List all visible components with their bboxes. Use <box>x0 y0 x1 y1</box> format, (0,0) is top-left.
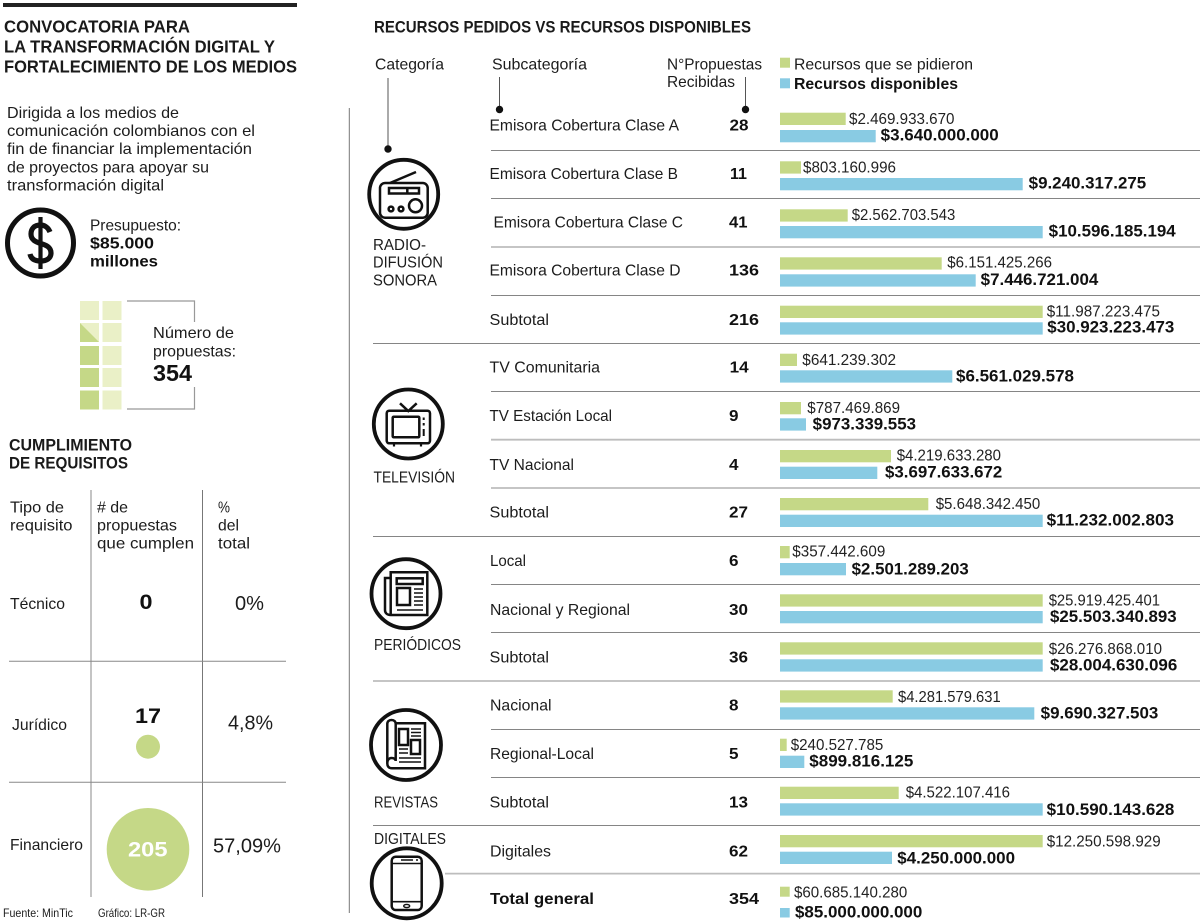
row: television subtotal: Subtotal <box>490 505 549 522</box>
row: Total general: Total general <box>490 891 594 908</box>
intro text: de proyectos para apoyar su <box>7 160 209 177</box>
row: Digitales: $4.250.000.000 <box>897 849 1015 867</box>
row: Nacional: $4.281.579.631 <box>898 689 1001 706</box>
row: Regional-Local: 5 <box>729 746 739 763</box>
row: Emisora Cobertura Clase B: Emisora Cobertura Clase B <box>490 166 678 183</box>
row: Emisora Cobertura Clase C <box>494 207 1177 241</box>
top rule <box>3 3 297 7</box>
source and credit: Fuente: MinTic <box>3 906 73 920</box>
title: LA TRANSFORMACIÓN DIGITAL Y <box>4 36 275 57</box>
row: Total general: $60.685.140.280 <box>794 885 907 902</box>
row: TV Nacional: $3.697.633.672 <box>885 463 1002 481</box>
title <box>4 17 297 77</box>
row: Local: Local <box>490 553 526 570</box>
column heads: % <box>218 500 230 517</box>
table grid <box>9 490 286 897</box>
row: Financiero: 205 <box>128 839 168 862</box>
row: periódicos subtotal: 36 <box>729 650 748 667</box>
column heads <box>10 500 250 553</box>
legend <box>780 56 973 93</box>
row: Emisora Cobertura Clase C: $2.562.703.543 <box>852 207 955 224</box>
row: Financiero: 57,09% <box>213 836 281 858</box>
icon: television <box>374 390 443 458</box>
budget text <box>90 218 181 271</box>
intro text: comunicación colombianos con el <box>7 123 255 140</box>
row: Digitales: 62 <box>729 844 748 861</box>
row: TV Comunitaria <box>490 352 1074 385</box>
row: Local: $2.501.289.203 <box>852 560 969 578</box>
category label: REVISTAS <box>374 794 438 811</box>
row: Regional-Local <box>490 737 913 771</box>
row: periódicos subtotal <box>490 641 1177 675</box>
row: Local <box>490 544 969 578</box>
proposals count text: Número de <box>153 325 234 342</box>
heading: DE REQUISITOS <box>9 454 128 473</box>
icon: radio <box>369 160 438 229</box>
title: FORTALECIMIENTO DE LOS MEDIOS <box>4 57 297 77</box>
row: Nacional: Nacional <box>490 698 552 715</box>
row: Jurídico: Jurídico <box>12 717 67 734</box>
row: television subtotal: 27 <box>729 505 748 522</box>
row: Financiero: Financiero <box>10 837 83 854</box>
category: digitales <box>372 831 446 918</box>
category label <box>373 237 443 290</box>
icon: dollar coin <box>8 210 74 276</box>
row: Nacional: $9.690.327.503 <box>1041 705 1158 723</box>
proportion squares <box>80 301 122 410</box>
legend: Recursos disponibles <box>794 76 958 93</box>
row: Total general: 354 <box>729 891 759 908</box>
heading <box>9 436 132 473</box>
row: Nacional y Regional: Nacional y Regional <box>490 602 630 619</box>
row: Jurídico: 4,8% <box>228 712 273 734</box>
row: TV Nacional: 4 <box>729 457 739 474</box>
row: Nacional y Regional: 30 <box>729 602 748 619</box>
row: Nacional: 8 <box>729 698 739 715</box>
icon: newspaper <box>372 559 440 628</box>
row: Emisora Cobertura Clase D <box>490 255 1099 289</box>
row: Emisora Cobertura Clase C: 41 <box>729 215 748 232</box>
row: TV Estación Local <box>490 400 916 433</box>
category label: RADIO- <box>373 237 426 254</box>
column headers: N°Propuestas <box>667 56 762 73</box>
row: Jurídico: 17 <box>135 705 161 728</box>
proposals count text <box>153 325 236 386</box>
row: Técnico <box>10 591 264 615</box>
category label: DIFUSIÓN <box>373 253 443 272</box>
column heads: del <box>218 518 239 535</box>
panel: recursos pedidos vs disponibles <box>369 19 1200 921</box>
column headers <box>375 56 762 91</box>
row: periódicos subtotal: Subtotal <box>490 650 549 667</box>
row: TV Nacional <box>490 448 1002 481</box>
row: Digitales <box>490 834 1161 867</box>
row: TV Nacional: TV Nacional <box>490 457 574 474</box>
row: periódicos subtotal: $26.276.868.010 <box>1049 641 1162 658</box>
row: revistas subtotal <box>490 785 1174 819</box>
row: Regional-Local: $240.527.785 <box>791 737 883 754</box>
row: Nacional y Regional: $25.503.340.893 <box>1050 608 1177 626</box>
row: radio subtotal: Subtotal <box>490 312 549 329</box>
row: Digitales: Digitales <box>490 844 551 861</box>
row: Emisora Cobertura Clase B <box>490 160 1146 192</box>
row: Financiero <box>10 808 281 891</box>
intro text <box>7 105 255 195</box>
row: Emisora Cobertura Clase A: Emisora Cobertura Clase A <box>490 118 679 135</box>
heading: CUMPLIMIENTO <box>9 436 132 455</box>
category: televisión <box>374 390 455 487</box>
row: Total general <box>490 885 922 921</box>
column heads: # de <box>97 500 128 517</box>
row: television subtotal: $11.232.002.803 <box>1047 511 1174 529</box>
row: radio subtotal: 216 <box>729 312 759 329</box>
row: Nacional y Regional <box>490 593 1177 626</box>
source and credit <box>3 906 165 920</box>
row: Emisora Cobertura Clase C: Emisora Cobertura Clase C <box>494 215 683 232</box>
row: Emisora Cobertura Clase D: Emisora Cobertura Clase D <box>490 263 680 280</box>
row: TV Comunitaria: TV Comunitaria <box>490 360 600 377</box>
row: Jurídico <box>12 705 273 759</box>
title: CONVOCATORIA PARA <box>4 17 190 37</box>
row: radio subtotal: $30.923.223.473 <box>1047 318 1174 336</box>
panel: cumplimiento de requisitos <box>3 436 286 920</box>
pointer lines <box>384 77 749 153</box>
row: Nacional <box>490 689 1158 723</box>
category label: DIGITALES <box>374 831 446 848</box>
intro text: Dirigida a los medios de <box>7 105 179 122</box>
row: TV Estación Local: 9 <box>729 408 739 425</box>
row: Nacional y Regional: $25.919.425.401 <box>1049 593 1160 610</box>
row: Local: $357.442.609 <box>792 544 885 561</box>
row: revistas subtotal: 13 <box>729 795 748 812</box>
row: TV Estación Local: $787.469.869 <box>807 400 900 417</box>
row: Emisora Cobertura Clase B: $9.240.317.275 <box>1029 174 1146 192</box>
row: Regional-Local: Regional-Local <box>490 746 594 763</box>
row: Emisora Cobertura Clase A: 28 <box>730 118 749 135</box>
row: Emisora Cobertura Clase A <box>490 111 999 145</box>
budget text: Presupuesto: <box>90 218 181 235</box>
legend: Recursos que se pidieron <box>794 56 973 73</box>
row: revistas subtotal: $10.590.143.628 <box>1047 801 1174 819</box>
column heads: requisito <box>10 518 73 535</box>
category label: PERIÓDICOS <box>374 635 461 654</box>
row: TV Estación Local: $973.339.553 <box>813 415 916 433</box>
row: Emisora Cobertura Clase D: $7.446.721.004 <box>981 271 1099 289</box>
source and credit: Gráfico: LR-GR <box>98 906 165 920</box>
row: Digitales: $12.250.598.929 <box>1047 834 1161 851</box>
row: Emisora Cobertura Clase C: $10.596.185.194 <box>1049 223 1177 241</box>
row: Local: 6 <box>729 553 739 570</box>
category label: TELEVISIÓN <box>374 468 455 487</box>
row: Emisora Cobertura Clase A: $2.469.933.670 <box>849 111 955 128</box>
row: TV Comunitaria: $641.239.302 <box>802 352 896 369</box>
row: periódicos subtotal: $28.004.630.096 <box>1050 657 1177 675</box>
row: TV Nacional: $4.219.633.280 <box>897 448 1001 465</box>
row: Emisora Cobertura Clase B: $803.160.996 <box>803 160 896 177</box>
row: Emisora Cobertura Clase D: 136 <box>729 263 759 280</box>
column headers: Categoría <box>375 56 444 73</box>
row: TV Estación Local: TV Estación Local <box>490 408 612 425</box>
row: TV Comunitaria: $6.561.029.578 <box>956 367 1074 385</box>
heading: RECURSOS PEDIDOS VS RECURSOS DISPONIBLES <box>374 19 751 37</box>
icon: smartphone <box>372 848 442 918</box>
row: TV Comunitaria: 14 <box>730 360 749 377</box>
intro text: transformación digital <box>7 178 164 195</box>
budget text: $85.000 <box>90 236 154 252</box>
bracket <box>127 301 194 409</box>
category: radiodifusión sonora <box>369 160 443 290</box>
proposals count text: propuestas: <box>153 344 236 361</box>
row: revistas subtotal: Subtotal <box>490 795 549 812</box>
column headers: Recibidas <box>667 74 735 91</box>
column headers: Subcategoría <box>492 56 587 73</box>
column heads: propuestas <box>97 518 177 535</box>
proposals count text: 354 <box>153 360 192 386</box>
row: radio subtotal: $11.987.223.475 <box>1047 304 1160 321</box>
row dividers <box>373 150 1200 874</box>
left column: call summary <box>3 3 297 410</box>
column heads: Tipo de <box>10 500 64 517</box>
category: revistas <box>371 710 441 811</box>
row: television subtotal <box>490 496 1174 529</box>
column heads: que cumplen <box>97 536 194 553</box>
row: Emisora Cobertura Clase D: $6.151.425.266 <box>947 255 1052 272</box>
budget text: millones <box>90 254 158 271</box>
row: Técnico: 0% <box>235 593 264 615</box>
icon: magazine <box>371 710 441 780</box>
row: Emisora Cobertura Clase B: 11 <box>730 166 747 183</box>
category: periódicos <box>372 559 461 654</box>
row: television subtotal: $5.648.342.450 <box>936 496 1040 513</box>
row: Técnico: Técnico <box>10 596 65 613</box>
row: radio subtotal <box>490 304 1174 336</box>
column heads: total <box>218 536 250 553</box>
row: Emisora Cobertura Clase A: $3.640.000.000 <box>881 127 999 145</box>
row: Regional-Local: $899.816.125 <box>809 753 913 771</box>
row: Total general: $85.000.000.000 <box>795 903 922 921</box>
row: Técnico: 0 <box>140 591 152 614</box>
intro text: fin de financiar la implementación <box>7 141 252 158</box>
category label: SONORA <box>373 273 437 290</box>
row: revistas subtotal: $4.522.107.416 <box>906 785 1010 802</box>
